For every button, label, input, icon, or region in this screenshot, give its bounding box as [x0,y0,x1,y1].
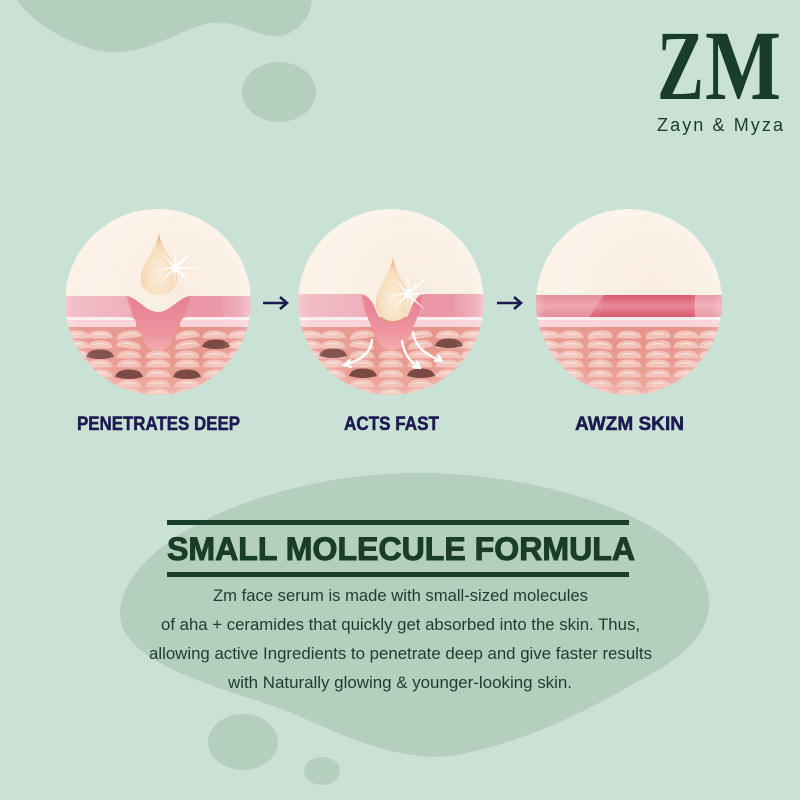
serum drop [141,233,177,295]
brand logo [657,10,784,135]
logo wordmark: Zayn & Myza [657,115,784,135]
decorative blob: bottom small oval [304,757,340,785]
panel: penetrates deep illustration [64,209,252,396]
dermis layer [298,317,484,395]
heading: SMALL MOLECULE FORMULA [167,531,635,567]
healthy skin cells [541,330,717,395]
large blob panel [120,473,709,757]
skin dome [298,209,484,317]
decorative blob: top [17,0,312,52]
label: awzm skin: AWZM SKIN [575,414,684,435]
dermis layer [65,317,251,395]
body text: of aha + ceramides that quickly get absorbed into the skin. Thus, [161,616,640,634]
logo monogram: Z [657,10,704,121]
body text: Zm face serum is made with small-sized molecules [213,587,588,605]
skin dome [536,209,722,295]
heading rule top [167,520,629,525]
body text: with Naturally glowing & younger-looking skin. [227,674,572,692]
pale skin band [538,319,720,327]
dark spots [86,340,230,379]
pale skin band [66,319,250,327]
serum drop [376,257,410,321]
smooth top skin layer [536,295,722,317]
dermis layer [536,317,722,395]
arrow 1 [263,297,287,309]
logo monogram [657,10,781,121]
heading rule bottom [167,572,629,577]
sparkle [154,249,200,286]
decorative blob: bottom oval [208,714,278,770]
decorative blob: small top oval [242,62,316,122]
top skin layer with dip [298,294,484,317]
body text [149,587,652,692]
arrow 2 [497,297,521,309]
panel: acts fast illustration [298,209,486,396]
label: acts fast: ACTS FAST [344,414,439,435]
body text: allowing active Ingredients to penetrate deep and give faster results [149,645,652,663]
dark spots [319,338,463,378]
logo monogram: M [705,10,781,121]
top skin layer with dip [65,296,251,344]
pale skin band [300,319,482,327]
panel: awzm skin illustration [536,209,724,396]
label: penetrates deep: PENETRATES DEEP [77,414,240,435]
skin dome [65,209,250,312]
absorption arrows [344,332,442,368]
sparkle [386,275,434,313]
